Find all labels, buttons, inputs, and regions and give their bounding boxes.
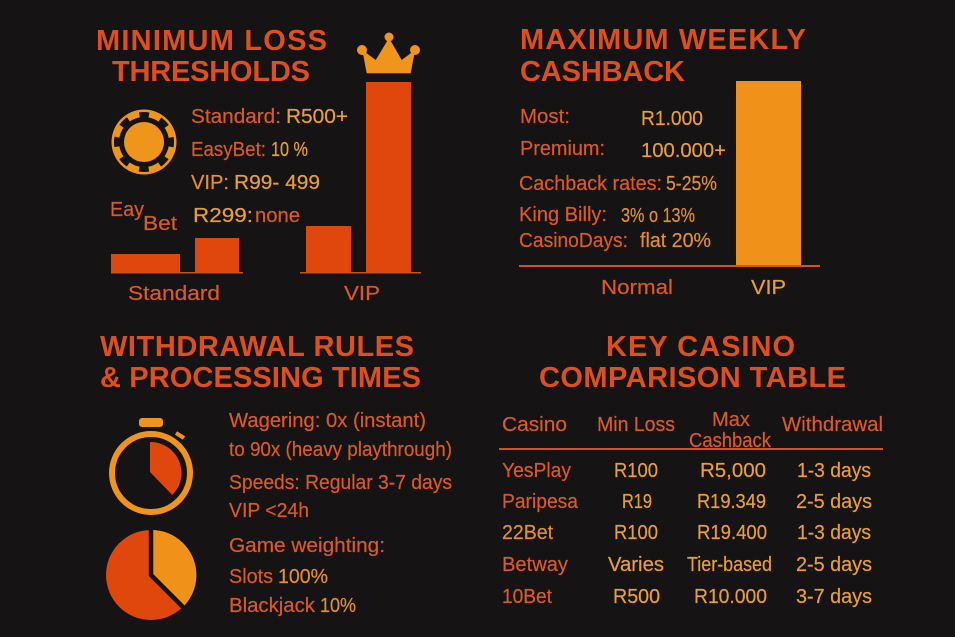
table row: Paripesa: R19.349	[697, 491, 766, 513]
heading: withdrawal rules: & PROCESSING TIMES	[100, 362, 421, 394]
text: cashback list: 100.000+	[641, 140, 726, 162]
heading: minimum loss thresholds: THRESHOLDS	[112, 56, 310, 88]
icon: stopwatch	[112, 418, 190, 512]
table row: Betway: Betway	[502, 554, 568, 576]
label: EasyBet misaligned: Eay	[110, 199, 144, 221]
heading: maximum weekly cashback: MAXIMUM WEEKLY	[520, 24, 806, 56]
text: thresholds list: R299:	[193, 205, 253, 227]
table row: Paripesa: 2-5 days	[796, 491, 872, 513]
text: thresholds list: R500+	[286, 106, 348, 128]
table header: Withdrawal	[782, 414, 883, 436]
heading: minimum loss thresholds: MINIMUM LOSS	[96, 25, 327, 57]
heading: maximum weekly cashback: CASHBACK	[520, 56, 685, 88]
heading: minimum loss thresholds	[96, 25, 327, 88]
table row: 22Bet: R19.400	[697, 522, 767, 544]
icon: crown	[357, 32, 420, 73]
panel: key casino comparison table	[499, 331, 883, 608]
table row: Betway: Tier-based	[687, 554, 772, 576]
table header: Max	[712, 409, 750, 431]
text: game weighting: 10%	[320, 595, 356, 617]
table row: 22Bet: 22Bet	[502, 522, 553, 544]
text: cashback list: Most:	[520, 106, 570, 128]
text: game weighting	[229, 535, 385, 617]
text: thresholds list	[191, 106, 348, 227]
table row: 10Bet: 10Bet	[502, 586, 552, 608]
label: EasyBet misaligned	[110, 199, 177, 235]
text: cashback list	[519, 106, 726, 252]
text: wagering and speeds: Speeds: Regular 3-7 days	[229, 472, 452, 494]
bar chart: cashback	[519, 81, 820, 299]
text: game weighting: Blackjack	[229, 595, 316, 617]
text: cashback list: 5-25%	[666, 173, 717, 195]
table row: 10Bet: 3-7 days	[796, 586, 872, 608]
text: cashback list: flat 20%	[640, 230, 711, 252]
table row: YesPlay	[502, 460, 871, 482]
text: cashback list: Premium:	[520, 138, 605, 160]
text: wagering and speeds	[229, 410, 452, 522]
text: cashback list: CasinoDays:	[519, 230, 628, 252]
text: wagering and speeds: Wagering: 0x (instant)	[229, 410, 426, 432]
bar chart: VIP: VIP	[344, 283, 380, 305]
table row: YesPlay: YesPlay	[502, 460, 571, 482]
heading: withdrawal rules: WITHDRAWAL RULES	[100, 331, 414, 363]
table row: 22Bet	[502, 522, 871, 544]
heading: comparison table: KEY CASINO	[606, 331, 795, 363]
table row: YesPlay: 1-3 days	[797, 460, 871, 482]
text: wagering and speeds: to 90x (heavy playthrough)	[229, 439, 452, 461]
table row: Paripesa: R19	[622, 491, 652, 513]
text: game weighting: 100%	[278, 566, 328, 588]
text: wagering and speeds: VIP <24h	[229, 500, 309, 522]
bar chart: standard	[111, 238, 243, 305]
text: game weighting: Slots	[229, 566, 273, 588]
text: cashback list: King Billy:	[519, 204, 607, 226]
label: EasyBet misaligned: Bet	[143, 213, 177, 235]
text: thresholds list: Standard:	[191, 106, 281, 128]
table row: 10Bet: R500	[613, 586, 660, 608]
table header: Cashback	[689, 430, 772, 452]
text: thresholds list: EasyBet:	[191, 139, 266, 161]
text: cashback list: Cachback rates:	[519, 173, 662, 195]
text: cashback list: R1.000	[641, 108, 703, 130]
icon: casino chip	[112, 110, 176, 174]
table row: Paripesa	[502, 491, 872, 513]
text: game weighting: Game weighting:	[229, 535, 385, 557]
text: cashback list: 3% o 13%	[621, 205, 695, 227]
text: thresholds list: VIP:	[191, 172, 229, 194]
heading: maximum weekly cashback	[520, 24, 806, 88]
table header: Min Loss	[597, 414, 675, 436]
table row: YesPlay: R100	[614, 460, 658, 482]
panel: minimum loss thresholds	[96, 25, 421, 305]
heading: comparison table: COMPARISON TABLE	[539, 362, 846, 394]
table row: 10Bet: R10.000	[694, 586, 767, 608]
table row: Betway: 2-5 days	[796, 554, 872, 576]
table row: YesPlay: R5,000	[700, 460, 766, 482]
table row: 22Bet: R100	[614, 522, 658, 544]
panel: maximum weekly cashback	[519, 24, 820, 299]
icon: pie chart	[106, 528, 196, 620]
table row: 22Bet: 1-3 days	[797, 522, 871, 544]
table row: Betway: Varies	[608, 554, 664, 576]
heading: comparison table	[539, 331, 846, 394]
bar chart: VIP	[300, 82, 421, 305]
table row: 10Bet	[502, 586, 872, 608]
bar chart: standard: Standard	[128, 283, 220, 305]
bar chart: cashback: Normal	[601, 277, 673, 299]
table row: Paripesa: Paripesa	[502, 491, 579, 513]
bar chart: cashback: VIP	[751, 277, 786, 299]
text: thresholds list: none	[255, 205, 300, 227]
table header	[499, 409, 883, 452]
text: thresholds list: 10 %	[271, 139, 308, 161]
table row: Betway	[502, 554, 872, 576]
text: thresholds list: R99- 499	[234, 172, 320, 194]
panel: withdrawal rules	[100, 331, 452, 620]
table header: Casino	[502, 414, 567, 436]
heading: withdrawal rules	[100, 331, 421, 394]
